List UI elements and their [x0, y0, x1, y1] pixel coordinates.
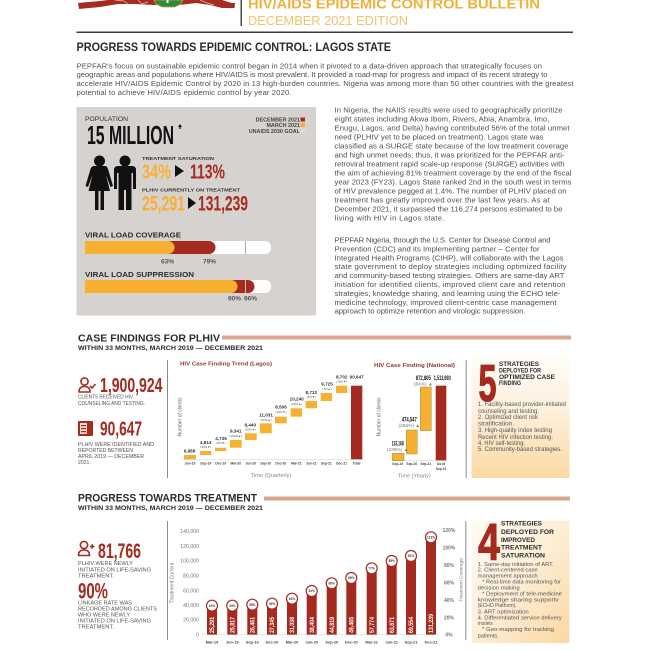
chart: treatment current and coverage — [170, 528, 464, 644]
chart: HIV case finding national: 133,168 — [392, 442, 404, 448]
chart: HIV case finding trend Lagos: Time (Quarterly) — [251, 473, 291, 479]
right axis: 80% — [444, 563, 455, 569]
chart: HIV case finding national: (84%) ▲ — [414, 381, 433, 387]
chart: treatment current and coverage: 42% — [289, 597, 295, 601]
chart: HIV case finding trend Lagos: 8,440 — [245, 422, 256, 427]
chart: HIV case finding trend Lagos: HIV Case Finding Trend (Lagos) — [180, 362, 272, 368]
chart: HIV case finding trend Lagos: Jun-20 — [245, 462, 256, 466]
stat: clients counselled — [78, 375, 163, 407]
stat: PLHIV identified: APRIL 2019 — DECEMBER — [78, 454, 144, 460]
stat: newly initiated: PLHIV WERE NEWLY — [78, 561, 133, 567]
chart: treatment current and coverage: 34% — [229, 604, 236, 608]
stat: linkage rate: TREATMENT. — [78, 624, 114, 630]
viral load suppression bar: 90% — [228, 296, 242, 302]
strategies list: 5. Community-based strategies. — [478, 447, 562, 453]
right axis: 0% — [445, 633, 453, 639]
right axis: 20% — [444, 615, 455, 621]
chart: HIV case finding trend Lagos: 6,888 — [184, 448, 196, 454]
chart: treatment current and coverage: Treatment Current — [170, 562, 176, 603]
chart: treatment current and coverage: 85% — [389, 559, 395, 563]
strategies list: 2. Client-centered case — [478, 567, 538, 573]
strategies list: * Deployment of tele-medicine — [482, 592, 562, 598]
strategies list: 1. Facility-based provider-initiated — [478, 402, 566, 408]
intro paragraph: geographic areas and populations where HIV/AIDS is most prevalent. It provided a road-map for progress and impact of its recent strategy to — [76, 70, 548, 79]
strategies list: 3. High-quality index testing — [478, 428, 552, 434]
section heading: progress towards treatment: PROGRESS TOWARDS TREATMENT — [78, 492, 257, 504]
chart: HIV case finding trend Lagos: Mar-20 — [230, 462, 241, 466]
strategies heading: STRATEGIES — [499, 361, 539, 368]
x axis labels: Dec-21 — [425, 640, 438, 644]
x axis labels: Sep-21 — [405, 640, 418, 644]
text block: Nigeria NAIIS results: classified as a SURGE state because of the low treatment coverage — [334, 142, 568, 150]
chart: treatment current and coverage: 80,000 — [183, 574, 199, 580]
chart: treatment current and coverage: 40,000 — [183, 603, 199, 609]
chart: HIV case finding trend Lagos: 90,647 — [350, 375, 364, 380]
strategies heading: FINDING — [499, 380, 521, 387]
stat: newly initiated: TREATMENT. — [78, 573, 114, 579]
x axis labels — [206, 640, 438, 644]
chart: treatment current and coverage: 60,000 — [183, 588, 199, 594]
intro paragraph: PEPFAR's focus on sustainable epidemic control began in 2014 when it pivoted to a data-driven approach that strategically focuses on — [76, 62, 542, 70]
chart: HIV case finding national: Sep-21 — [436, 467, 447, 471]
intro paragraph — [76, 62, 574, 97]
strategies list: stratification. — [478, 422, 514, 428]
chart: HIV case finding national: 872,805 — [416, 376, 431, 382]
bar values: 31,038 — [289, 617, 296, 633]
section heading: progress towards epidemic control: PROGRESS TOWARDS EPIDEMIC CONTROL: LAGOS STATE — [76, 42, 391, 54]
icon: man — [114, 156, 136, 210]
chart: HIV case finding national: Sep-20 — [406, 462, 417, 466]
stat: linkage rate: LINKAGE RATE WAS — [78, 601, 132, 607]
text block: Nigeria NAIIS results: eight states including Akwa Ibom, Rivers, Abia, Anambra, Imo, — [334, 114, 550, 124]
text block: Nigeria NAIIS results: retroviral treatment rapid scale-up response (SURGE) activities with — [334, 160, 564, 168]
strategies list: 2. Optimized client risk — [478, 415, 539, 421]
viral load coverage bar: 79% — [203, 260, 217, 266]
chart: HIV case finding trend Lagos: (10%▼) — [245, 428, 256, 432]
text block: PEPFAR Nigeria strategies: medicine technology, improved client-centric case management — [334, 298, 557, 307]
bar values: 44,819 — [329, 617, 336, 633]
chart: HIV case finding national: Sep-19 — [392, 462, 403, 466]
chart: treatment current and coverage: 35% — [249, 603, 256, 607]
chart: HIV case finding trend Lagos: 9,725 — [321, 382, 333, 387]
chart: HIV case finding trend Lagos: (10%▼) — [336, 379, 347, 383]
edition: DECEMBER 2021 EDITION — [248, 14, 408, 28]
panel: four strategies — [472, 514, 569, 643]
x axis labels: Mar-21 — [365, 640, 379, 644]
bar values: 25,817 — [230, 617, 236, 633]
chart: treatment current and coverage: 20,000 — [183, 618, 199, 624]
chart: treatment current and coverage: 120,000 — [180, 544, 199, 550]
chart: treatment current and coverage: 34% — [209, 604, 215, 608]
chart: treatment current and coverage: 100,000 — [180, 559, 199, 565]
chart: HIV case finding trend Lagos: Jun-21 — [306, 462, 317, 466]
section heading: progress towards treatment: WITHIN 33 MONTHS, MARCH 2019 — DECEMBER 2021 — [78, 506, 264, 512]
stat: newly initiated: INITIATED ON LIFE-SAVING — [78, 567, 151, 573]
legend: DECEMBER 2021 — [256, 118, 300, 124]
icon: report — [78, 421, 93, 436]
chart: treatment current and coverage: 36% — [269, 602, 275, 606]
intro paragraph: accelerate HIV/AIDS Epidemic Control by 2020 in 13 high-burden countries. Nigeria was among more than 50 other countries with the greatest — [76, 79, 574, 88]
panel: five strategies — [472, 355, 570, 478]
strategies list: * Real-time data monitoring for — [482, 579, 561, 585]
text block: PEPFAR Nigeria strategies: PEPFAR Nigeria, through the U.S. Center for Disease Control and — [334, 236, 550, 244]
legend: UNAIDS 2030 GOAL — [249, 129, 301, 135]
intro paragraph: potential to achieve HIV/AIDS epidemic control by year 2020. — [76, 88, 292, 97]
right axis: 120% — [443, 528, 456, 534]
chart: HIV case finding trend Lagos: Mar-21 — [291, 462, 302, 466]
chart: HIV case finding national: Sep-21 — [420, 462, 431, 466]
x axis labels: Jun-21 — [385, 640, 399, 644]
stat: clients counselled: COUNSELING AND TESTING. — [78, 401, 145, 407]
chart: HIV case finding trend Lagos: (100%▲) — [229, 434, 242, 438]
bar values: 26,461 — [250, 617, 256, 633]
chart: HIV case finding trend Lagos: Number of clients — [178, 397, 184, 436]
viral load suppression bar — [85, 272, 271, 302]
text block: PEPFAR Nigeria strategies: initiation for identified clients, improved client care and retention — [334, 280, 566, 289]
chart: HIV case finding trend Lagos: (41%▲) — [261, 418, 271, 422]
legend: MARCH 2021 — [266, 123, 300, 129]
big numeral 5: 5 — [478, 355, 496, 413]
chart: HIV case finding trend Lagos: 8,702 — [336, 375, 348, 380]
panel: Lagos key figures — [76, 107, 316, 316]
chart: HIV case finding trend Lagos: 8,712 — [306, 390, 317, 395]
text block: Nigeria NAIIS results — [334, 106, 572, 222]
strategies heading — [501, 520, 554, 560]
text block: PEPFAR Nigeria strategies: Prevention (CDC) and its Implementing partner – Center for — [334, 244, 540, 253]
strategies list: patients. — [478, 633, 499, 639]
viral load coverage bar — [85, 232, 271, 266]
strategies list: (ECHO Platform). — [478, 603, 517, 609]
stat: PLHIV identified: REPORTED BETWEEN — [78, 448, 133, 454]
stat: linkage rate: WHO WERE NEWLY — [78, 612, 130, 618]
stat: PLHIV identified: 90,647 — [100, 418, 142, 440]
text block: PEPFAR Nigeria strategies: strategies, knowledge sharing, and learning using the ECHO tele- — [334, 289, 561, 298]
strategies list: counseling and testing. — [478, 409, 539, 415]
bar values: 27,345 — [269, 617, 276, 633]
text block: PEPFAR Nigeria strategies: approach to optimize retention and virologic suppression. — [334, 307, 526, 316]
text block: Nigeria NAIIS results: Enugu, Lagos, and Delta) having contributed 56% of the total unmet — [334, 124, 570, 132]
chart: treatment current and coverage: 66% — [348, 576, 355, 580]
x axis labels: Mar-20 — [286, 640, 298, 644]
big numeral 4: 4 — [478, 514, 500, 572]
stat: linkage rate — [78, 578, 157, 630]
bars — [207, 538, 436, 634]
strategies list: 1. Same-day initiation of ART. — [478, 562, 554, 568]
right axis: 40% — [444, 598, 455, 604]
chart: HIV case finding trend Lagos: 4,814 — [200, 440, 212, 445]
strategies list: 3. ART optimization — [478, 609, 529, 615]
stat: clients counselled: CLIENTS RECEIVED HIV — [78, 394, 134, 400]
chart: HIV case finding trend Lagos — [178, 362, 364, 479]
text block: Nigeria NAIIS results: December 2021, it surpassed the 116,274 persons estimated to be — [334, 204, 562, 214]
PLHIV on treatment: 25,291 — [142, 192, 185, 216]
text block: Nigeria NAIIS results: of HIV prevalence pegged at 1.4%. The number of PLHIV placed on — [334, 186, 566, 196]
chart: HIV case finding national: 1,513,693 — [434, 376, 451, 382]
chart: treatment current and coverage: 113% — [427, 536, 435, 540]
chart: treatment current and coverage: 91% — [408, 554, 414, 558]
header divider — [240, 0, 242, 26]
strategies heading: DEPLOYED FOR — [501, 529, 554, 536]
chart: HIV case finding trend Lagos: Dec-20 — [275, 462, 286, 466]
chart: HIV case finding trend Lagos: (6%▼) — [216, 441, 226, 445]
strategies heading — [499, 361, 555, 387]
bar values: 38,404 — [309, 617, 316, 633]
viral load suppression bar: VIRAL LOAD SUPPRESSION — [85, 272, 194, 279]
strategies heading: OPTIMIZED CASE — [499, 374, 555, 381]
right axis: 100% — [443, 546, 456, 552]
x axis labels: Jun-19 — [226, 640, 239, 644]
chart: HIV case finding national: As at — [437, 462, 446, 466]
viral load coverage bar: VIRAL LOAD COVERAGE — [85, 232, 181, 240]
text block: PEPFAR Nigeria strategies: state government to deploy strategies including optimized facility — [334, 262, 567, 271]
strategies heading: IMPROVED — [501, 537, 535, 544]
coverage markers — [206, 532, 436, 611]
chart: HIV case finding national: Time (Yearly) — [398, 474, 431, 480]
x axis labels: Dec-20 — [345, 640, 358, 644]
strategies heading: TREATMENT — [501, 544, 542, 552]
strategies list: * Geo-mapping for tracking — [482, 627, 554, 633]
right axis — [443, 528, 464, 639]
chart: HIV case finding trend Lagos: 10,240 — [290, 396, 304, 401]
chart: HIV case finding trend Lagos: Dec-21 — [336, 462, 347, 466]
x axis labels: Dec-20 — [266, 640, 278, 644]
right axis: Treatment Coverage — [458, 558, 464, 602]
bar values: 49,465 — [348, 617, 356, 633]
bar values — [209, 614, 435, 633]
section heading: case findings: CASE FINDINGS FOR PLHIV — [78, 332, 220, 344]
bar values: 63,671 — [389, 617, 396, 633]
icon: person plus — [78, 541, 94, 556]
stat: PLHIV identified: 2021. — [78, 460, 91, 466]
stat: linkage rate: INITIATED ON LIFE-SAVING — [78, 618, 151, 624]
strategies heading: DEPLOYED FOR — [499, 367, 541, 374]
bar values: 131,239 — [428, 614, 435, 633]
stat: newly initiated — [78, 540, 151, 579]
legend — [249, 118, 305, 135]
strategies list: management approach — [478, 573, 538, 579]
PLHIV on treatment — [142, 188, 248, 216]
text block: Nigeria NAIIS results: and high unmet needs; thus, it was prioritized for the PEPFAR anti- — [334, 150, 565, 160]
x axis labels: Mar-19 — [206, 640, 219, 644]
stat: PLHIV identified: PLHIV WERE IDENTIFIED AND — [78, 442, 154, 448]
strategies list: 4. HIV self-testing. — [478, 441, 525, 447]
chart: treatment current and coverage: 0 — [196, 633, 199, 639]
chart: HIV case finding national: 474,547 — [402, 418, 417, 424]
section heading: case findings — [78, 332, 571, 352]
right axis: 60% — [444, 581, 455, 587]
chart: treatment current and coverage: 140,000 — [180, 529, 199, 535]
stat: PLHIV identified — [78, 418, 154, 466]
chart: HIV case finding trend Lagos: 4,735 — [215, 436, 227, 441]
PLHIV on treatment: PLHIV CURRENTLY ON TREATMENT — [142, 188, 240, 194]
chart: HIV case finding trend Lagos: (33%▼) — [200, 445, 211, 449]
icon: person check — [79, 378, 96, 392]
text block: PEPFAR Nigeria strategies: and community-based testing strategies. Others are same-day ART — [334, 271, 565, 280]
section heading: progress towards treatment — [78, 492, 570, 512]
strategies heading: SATURATION — [501, 552, 545, 560]
chart: HIV case finding trend Lagos: Total — [353, 462, 360, 466]
stat: clients counselled: 1,900,924 — [100, 375, 163, 397]
chart: treatment current and coverage: 60% — [329, 582, 335, 586]
chart: HIV case finding trend Lagos: Sep-19 — [200, 462, 211, 466]
strategies list: knowledge sharing supportv — [478, 597, 559, 603]
stat: linkage rate: 90% — [78, 578, 108, 604]
chart: HIV case finding trend Lagos: 8,506 — [275, 405, 287, 410]
bar values: 69,554 — [408, 617, 415, 633]
chart: HIV case finding trend Lagos: (3%▼) — [307, 395, 316, 399]
text block: Nigeria NAIIS results: living with HIV in Lagos state. — [334, 214, 444, 222]
treatment saturation: 113% — [190, 162, 225, 184]
viral load suppression bar: 96% — [244, 296, 258, 302]
chart: treatment current and coverage: 77% — [369, 566, 375, 570]
chart: HIV case finding national: Number of clients — [376, 397, 382, 436]
strategies list — [478, 562, 562, 639]
chart: HIV case finding trend Lagos: 11,031 — [259, 413, 273, 418]
text block: Nigeria NAIIS results: need (PLHIV yet to be placed on treatment). Lagos state was — [334, 132, 544, 142]
text block: Nigeria NAIIS results: year 2023 (FY23). Lagos State ranked 2nd in the south west in terms — [334, 178, 572, 186]
treatment saturation: TREATMENT SATURATION — [142, 156, 215, 162]
strategies list: decision making — [478, 585, 520, 591]
treatment saturation — [142, 156, 225, 184]
text block: Nigeria NAIIS results: treatment has greatly improved over the last few years. As at — [334, 196, 550, 204]
text block: PEPFAR Nigeria strategies — [334, 236, 567, 316]
chart: HIV case finding trend Lagos: 9,341 — [230, 429, 242, 434]
section heading: case findings: WITHIN 33 MONTHS, MARCH 2019 — DECEMBER 2021 — [78, 346, 264, 352]
text block: Nigeria NAIIS results: In Nigeria, the NAIIS results were used to geographically prioritize — [334, 106, 562, 114]
strategies list — [478, 402, 566, 453]
PLHIV on treatment: 131,239 — [198, 192, 248, 216]
header map and emblem — [78, 0, 235, 9]
bar values: 57,774 — [369, 617, 376, 633]
x axis labels: Sep-20 — [325, 640, 338, 644]
chart: HIV case finding trend Lagos: Dec-19 — [215, 462, 226, 466]
strategies list: models — [478, 621, 493, 627]
chart: HIV case finding trend Lagos: Sep-21 — [321, 462, 332, 466]
chart: HIV case finding trend Lagos: Jun-19 — [185, 462, 195, 466]
bar values: 25,291 — [209, 617, 216, 633]
strategies list: 4. Differentiated service delivery — [478, 615, 562, 621]
icon: woman — [86, 156, 113, 210]
chart: HIV case finding national: (256%) ▲ — [399, 423, 420, 429]
viral load coverage bar: 63% — [161, 260, 175, 266]
text block: PEPFAR Nigeria strategies: Integrated Health Programs (CIHP), will collaborate with the Lagos — [334, 253, 564, 262]
chart: HIV case finding trend Lagos: Sep-20 — [260, 462, 271, 466]
population value: 15 MILLION — [87, 120, 174, 150]
population label: POPULATION — [85, 117, 128, 123]
strategies heading: STRATEGIES — [501, 520, 542, 528]
chart: HIV case finding trend Lagos: (20%▲) — [291, 402, 302, 406]
chart: treatment current and coverage: 51% — [309, 589, 315, 593]
x axis labels: Jun-20 — [305, 640, 318, 644]
stat: linkage rate: RECORDED AMONG CLIENTS — [78, 607, 157, 613]
up arrow — [178, 124, 182, 129]
strategies list: Recent HIV infection testing. — [478, 435, 553, 441]
stat: newly initiated: 81,766 — [98, 540, 141, 563]
chart: HIV case finding national: HIV Case Finding (National) — [374, 363, 455, 369]
chart: HIV case finding trend Lagos: (7%▲) — [322, 387, 332, 391]
chart: HIV case finding trend Lagos: (29%▼) — [276, 410, 286, 414]
x axis labels: Sep-19 — [246, 640, 260, 644]
chart: HIV case finding national — [374, 363, 455, 480]
text block: Nigeria NAIIS results: the aim of achieving 81% treatment coverage by the end of the fiscal — [334, 168, 572, 178]
chart: HIV case finding national: (238%) ▲ — [387, 447, 408, 453]
treatment saturation: 34% — [142, 162, 171, 184]
